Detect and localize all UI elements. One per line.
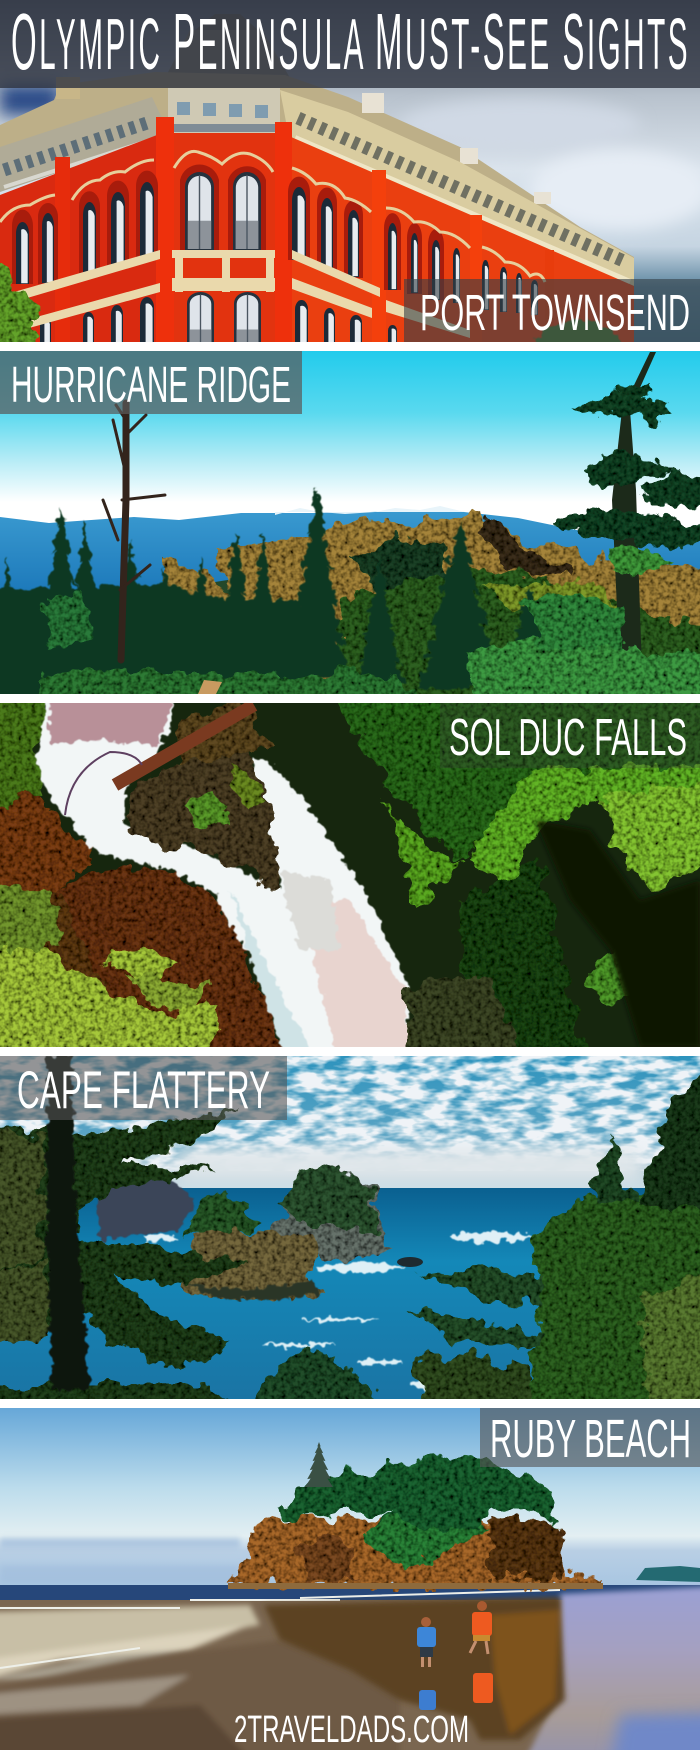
left rock walls bbox=[0, 703, 283, 1047]
foreground conifers bbox=[0, 486, 542, 694]
trail bbox=[198, 680, 222, 694]
surf bbox=[140, 1232, 532, 1396]
reflection pool bbox=[264, 1597, 565, 1740]
island forest bbox=[277, 1453, 558, 1567]
reflections of children bbox=[419, 1673, 493, 1710]
deep-red arch surrounds bbox=[12, 164, 444, 300]
child in orange bbox=[470, 1601, 492, 1654]
building belt courses bbox=[0, 250, 470, 338]
sky bbox=[0, 1408, 700, 1586]
panel: Ruby Beach photo bbox=[0, 1408, 700, 1750]
panel: Port Townsend photo bbox=[0, 0, 700, 370]
foreground foliage bbox=[0, 884, 222, 1047]
label band: Hurricane Ridge bbox=[0, 351, 302, 414]
panel: Hurricane Ridge photo bbox=[0, 351, 700, 730]
dark gorge background bbox=[0, 703, 700, 1047]
tree on island bbox=[305, 1442, 333, 1487]
rippled brown sand bbox=[0, 1640, 400, 1750]
building cream trim bbox=[0, 151, 545, 282]
fallen log bbox=[115, 705, 254, 785]
building facades bbox=[0, 88, 634, 342]
right trees bbox=[237, 1040, 700, 1420]
beach base bbox=[0, 1600, 700, 1750]
rubble base of island bbox=[228, 1583, 603, 1589]
small sea rock bbox=[397, 1257, 423, 1267]
tree: lower left bbox=[0, 262, 40, 342]
left tree bbox=[0, 1056, 270, 1420]
mountains bbox=[0, 506, 700, 600]
horizon brightness bbox=[180, 1150, 640, 1180]
central rock with moss bbox=[125, 705, 281, 890]
sea stacks bbox=[183, 1165, 392, 1300]
label: Hurricane Ridge: HURRICANE RIDGE bbox=[11, 356, 291, 413]
ocean bbox=[0, 1188, 700, 1399]
building roof and cupola bbox=[0, 14, 634, 278]
sea bbox=[0, 1585, 700, 1605]
sky bbox=[0, 1056, 700, 1189]
clouds bbox=[0, 85, 700, 230]
title band bbox=[0, 0, 700, 88]
website credit: 2TRAVELDADS.COM bbox=[234, 1709, 469, 1750]
forest patches on ridge bbox=[336, 514, 700, 694]
green shrubs bbox=[38, 590, 700, 694]
right lavender wet sand bbox=[520, 1586, 700, 1750]
moss walls bbox=[338, 703, 700, 1047]
cloud streaks bbox=[0, 1538, 240, 1583]
lower right boulder bbox=[401, 976, 517, 1047]
sky behind building bbox=[0, 0, 700, 342]
sky bbox=[0, 351, 700, 498]
tree: lower right bbox=[533, 318, 622, 342]
distant headland bbox=[636, 1566, 700, 1582]
left cliff bbox=[95, 1170, 196, 1240]
mottled clouds bbox=[0, 1056, 700, 1171]
label band: Ruby Beach bbox=[480, 1408, 700, 1467]
dead snag tree bbox=[103, 403, 165, 660]
waterfall water bbox=[36, 690, 411, 1070]
panel: Cape Flattery photo bbox=[0, 1040, 700, 1420]
child in blue bbox=[417, 1617, 436, 1667]
building arched windows bbox=[16, 172, 538, 355]
white surf lines bbox=[0, 1590, 560, 1668]
pale sand on left bbox=[0, 1605, 260, 1680]
dark cavern bbox=[535, 820, 700, 1047]
label: Cape Flattery: CAPE FLATTERY bbox=[17, 1061, 270, 1120]
label band: Sol Duc Falls bbox=[440, 703, 700, 768]
wire arc bbox=[65, 752, 142, 815]
tall tree on right bbox=[553, 352, 700, 673]
label band: Cape Flattery bbox=[0, 1056, 287, 1120]
label band: Port Townsend bbox=[404, 279, 700, 342]
brown ridge bbox=[162, 508, 700, 680]
island rock bbox=[228, 1517, 603, 1586]
panel: Sol Duc Falls photo bbox=[0, 703, 700, 1047]
solid hillside underlay bbox=[215, 580, 232, 596]
